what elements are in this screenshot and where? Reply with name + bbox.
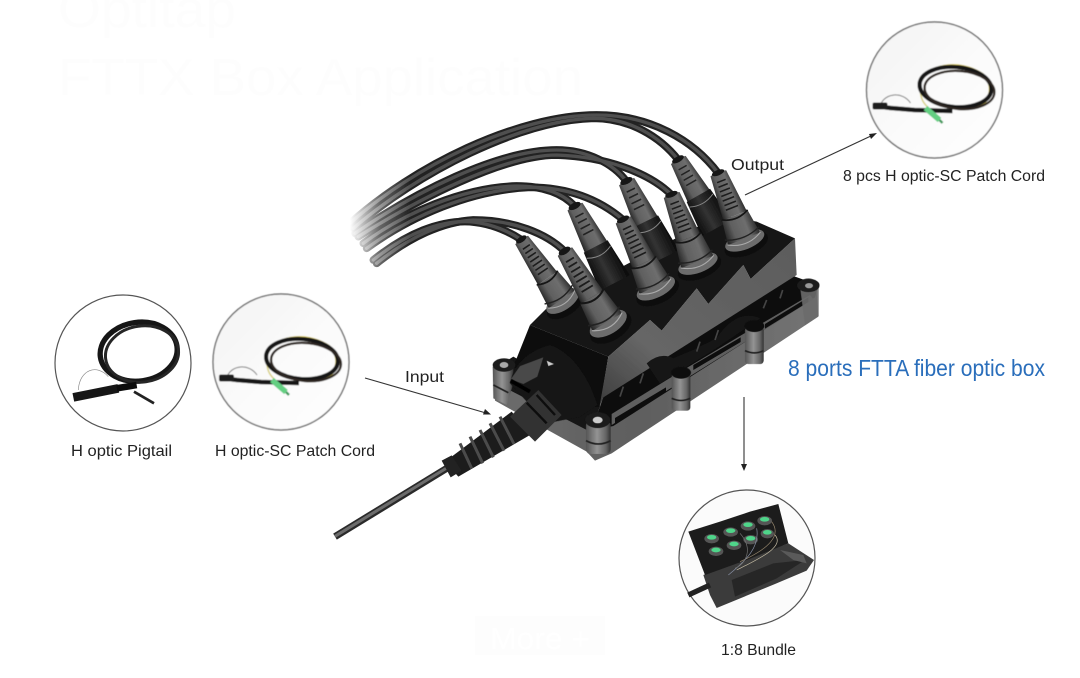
thumbnail: H optic-SC Patch Cord xyxy=(213,294,349,430)
label: H optic Pigtail: H optic Pigtail xyxy=(71,443,172,460)
main product: 8 ports fiber optic box xyxy=(493,215,818,461)
thumbnail: H optic Pigtail xyxy=(55,295,191,431)
left corner post xyxy=(493,358,515,405)
arrow: bundle xyxy=(741,397,747,471)
input strain relief and cable xyxy=(335,390,562,537)
box top face xyxy=(530,215,795,357)
thumbnail: 1:8 Bundle xyxy=(679,490,815,626)
connectors xyxy=(502,149,772,351)
flange slots xyxy=(615,297,808,423)
left black flange xyxy=(493,357,600,432)
ghost button: More + xyxy=(475,616,605,656)
right corner post xyxy=(797,279,820,325)
label: 1:8 Bundle: 1:8 Bundle xyxy=(721,642,796,659)
output cables xyxy=(350,115,718,263)
front black flange xyxy=(590,276,818,432)
arrow: input xyxy=(365,378,491,414)
front corner post xyxy=(585,412,611,454)
label: 8 pcs H optic-SC Patch Cord: 8 pcs H optic-SC Patch Cord xyxy=(843,168,1045,185)
mid post two xyxy=(744,320,764,364)
arrow: output xyxy=(745,133,877,195)
ghost title xyxy=(58,0,583,107)
label: input: Input xyxy=(405,369,445,386)
product name label: 8 ports FTTA fiber optic box xyxy=(788,355,1045,381)
box front slope xyxy=(599,238,797,407)
ghost button: More +: More + xyxy=(490,621,590,656)
label: H optic-SC Patch Cord: H optic-SC Patch Cord xyxy=(215,443,375,460)
gray ledges xyxy=(612,295,813,425)
mid post one xyxy=(671,367,691,411)
flange shadow bumps xyxy=(647,316,760,383)
thumbnail: 8 pcs H optic-SC Patch Cord xyxy=(866,22,1002,158)
ghost title: FTTX Box Application xyxy=(58,49,583,107)
gland nut xyxy=(510,390,562,442)
box lower wall xyxy=(493,290,818,461)
gland dome xyxy=(510,345,597,423)
box left face xyxy=(513,325,608,407)
corner and side posts, gland xyxy=(493,279,820,454)
label: output: Output xyxy=(731,157,785,174)
